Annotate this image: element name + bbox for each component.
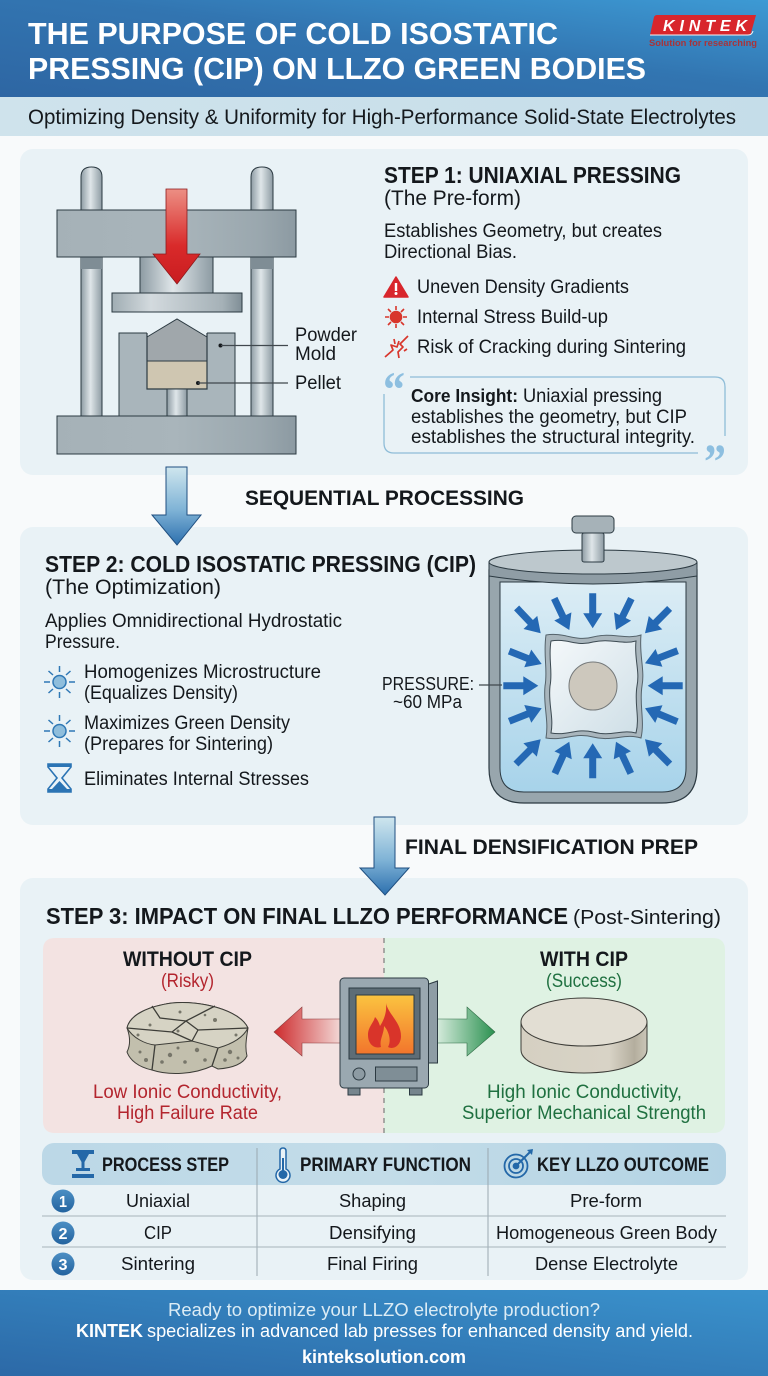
row: CIP (52, 1222, 718, 1244)
label: pressure: ~60 MPa (393, 692, 463, 712)
text: call to action: KINTEK (76, 1320, 144, 1341)
text: internal stress: Internal Stress Build-up (417, 307, 608, 328)
row: CIP: CIP (144, 1222, 172, 1243)
heading: step 1 (384, 162, 681, 210)
flexible bag (545, 634, 643, 739)
heading: step 2: STEP 2: COLD ISOSTATIC PRESSING (CIP) (45, 551, 476, 577)
heading: step 2: (The Optimization) (45, 576, 221, 599)
footer banner (0, 1290, 768, 1376)
text: call to action: specializes in advanced lab presses for enhanced density and yield. (147, 1320, 693, 1341)
row: CIP: 2 (58, 1226, 68, 1243)
text: insight copy (411, 385, 695, 448)
header banner (0, 0, 768, 97)
subtitle band: Optimizing Density & Uniformity for High-Performance Solid-State Electrolytes (28, 105, 736, 129)
header: key outcome: KEY LLZO OUTCOME (537, 1155, 709, 1176)
icon: hourglass (48, 764, 71, 792)
icon: crack (385, 336, 408, 358)
text: step 2 description: Applies Omnidirectional Hydrostatic (45, 611, 342, 632)
heading: without CIP: WITHOUT CIP (123, 948, 252, 971)
row: sintering (52, 1252, 678, 1276)
panel: without CIP (43, 938, 384, 1133)
label: pressure (382, 674, 502, 712)
divider: dashed centre line (383, 938, 385, 1133)
text: step 1 description (384, 221, 662, 263)
row: uniaxial (52, 1190, 642, 1212)
text: step 2 description: Pressure. (45, 632, 120, 653)
text: homogenizes: (Equalizes Density) (84, 683, 238, 704)
text: call to action: Ready to optimize your LLZO electrolyte production? (168, 1299, 600, 1320)
text: step 1 description: Establishes Geometry, but creates (384, 221, 662, 242)
icon: opening quote: “ (383, 361, 405, 417)
callout: core insight (383, 361, 726, 489)
label: powder mold (218, 325, 358, 365)
row: uniaxial: 1 (59, 1194, 67, 1211)
arrow: sequential processing (152, 467, 201, 545)
illustration: sintering furnace (340, 978, 438, 1095)
header: process step: PROCESS STEP (102, 1155, 229, 1176)
text: with CIP outcome: High Ionic Conductivity, (487, 1082, 682, 1103)
logo: KINTEK: Solution for researching (649, 38, 757, 48)
text: insight copy: establishes the structural integrity. (411, 427, 695, 448)
title: PRESSING (CIP) ON LLZO GREEN BODIES (28, 51, 646, 86)
title: THE PURPOSE OF COLD ISOSTATIC (28, 16, 558, 51)
illustration: cracked pellet (127, 1002, 248, 1073)
text: eliminates: Eliminates Internal Stresses (84, 769, 309, 790)
pressure arrows (503, 593, 683, 778)
icon: maximize density (44, 715, 75, 747)
heading: step 2 (45, 551, 476, 599)
logo: KINTEK (649, 15, 757, 48)
text: with CIP outcome: Superior Mechanical Strength (462, 1103, 706, 1124)
subtitle band (0, 97, 768, 136)
arrow: to with CIP (437, 1007, 495, 1056)
label: final densification prep: FINAL DENSIFICATION PREP (405, 836, 698, 859)
illustration: CIP vessel (489, 516, 697, 803)
icon: homogenize (44, 666, 75, 698)
panel: step 2 (20, 516, 748, 825)
text: with CIP outcome (462, 1082, 706, 1124)
title (28, 16, 646, 86)
label: pellet: Pellet (295, 373, 342, 394)
table: process summary (42, 1143, 726, 1276)
label: powder mold: Powder (295, 325, 358, 346)
label: powder mold: Mold (295, 344, 336, 365)
text: without CIP outcome: Low Ionic Conductivity, (93, 1082, 282, 1103)
text: call to action (76, 1299, 693, 1367)
icon: flame (368, 1003, 401, 1048)
heading: step 1: STEP 1: UNIAXIAL PRESSING (384, 162, 681, 188)
text: homogenizes (84, 662, 321, 704)
panel: step 3 (20, 878, 748, 1280)
text: risky: (Risky) (161, 971, 214, 992)
text: call to action: kinteksolution.com (302, 1346, 466, 1367)
text: maximizes: (Prepares for Sintering) (84, 734, 273, 755)
row: uniaxial: Uniaxial (126, 1190, 190, 1211)
heading: step 3: STEP 3: IMPACT ON FINAL LLZO PERFORMANCE (46, 903, 568, 929)
label: sequential processing: SEQUENTIAL PROCESSING (245, 487, 524, 510)
row: CIP: Densifying (329, 1222, 416, 1243)
arrow: final densification (360, 817, 409, 895)
icon: target (504, 1149, 533, 1178)
icon: thermometer (276, 1148, 290, 1182)
heading: with CIP: WITH CIP (540, 948, 628, 971)
row: sintering: Final Firing (327, 1253, 418, 1274)
text: step 1 description: Directional Bias. (384, 242, 517, 263)
illustration: intact pellet (521, 998, 647, 1073)
text: maximizes (84, 713, 290, 755)
icon: stress burst (385, 306, 407, 328)
text: insight copy: establishes the geometry, but CIP (411, 407, 687, 428)
icon: press column (72, 1150, 94, 1178)
vessel body (489, 570, 697, 803)
text: cracking risk: Risk of Cracking during Sintering (417, 337, 686, 358)
text: homogenizes: Homogenizes Microstructure (84, 662, 321, 683)
text: step 2 description (45, 611, 342, 653)
text: insight copy: Uniaxial pressing (523, 386, 662, 407)
text: maximizes: Maximizes Green Density (84, 713, 290, 734)
panel: with CIP (384, 938, 725, 1133)
text: without CIP outcome (93, 1082, 282, 1124)
label: pellet (196, 373, 342, 394)
label: pressure: PRESSURE: (382, 674, 474, 694)
heading: step 3: (Post-Sintering) (573, 906, 721, 929)
text: without CIP outcome: High Failure Rate (117, 1103, 258, 1124)
pellet in bag (569, 662, 617, 710)
logo: KINTEK: KINTEK (663, 18, 748, 35)
header: primary function: PRIMARY FUNCTION (300, 1155, 471, 1176)
illustration: uniaxial press (57, 167, 296, 454)
arrow: to without CIP (274, 1007, 340, 1056)
arrow: pressing force (153, 189, 200, 284)
panel: step 1 (20, 149, 748, 489)
vessel lid (489, 516, 697, 584)
text: uneven density: Uneven Density Gradients (417, 277, 629, 298)
row: uniaxial: Pre-form (570, 1190, 642, 1211)
icon: warning (384, 277, 408, 297)
row: uniaxial: Shaping (339, 1190, 406, 1211)
row: sintering: 3 (58, 1257, 68, 1274)
row: sintering: Sintering (121, 1253, 195, 1274)
row: CIP: Homogeneous Green Body (496, 1222, 718, 1243)
icon: closing quote: ” (704, 433, 726, 489)
text: success: (Success) (546, 971, 622, 992)
heading: step 1: (The Pre-form) (384, 187, 521, 210)
text: insight copy: Core Insight: (411, 385, 518, 406)
row: sintering: Dense Electrolyte (535, 1253, 678, 1274)
